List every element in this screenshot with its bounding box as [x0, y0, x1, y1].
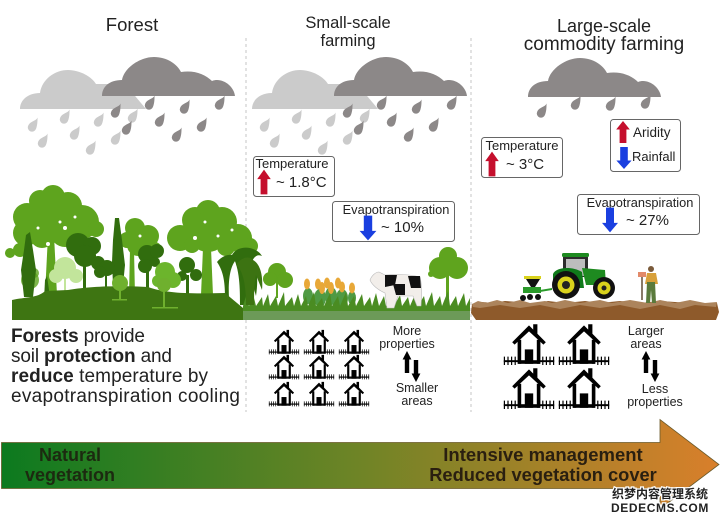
- cow: [370, 272, 422, 308]
- gradient arrow: Intensive management: [443, 444, 643, 465]
- label: more properties / smaller areas: More: [393, 324, 421, 338]
- callout: aridity and rainfall: Aridity: [633, 125, 671, 140]
- label: more properties / smaller areas: [379, 324, 438, 408]
- callout: temperature large-scale: [482, 138, 562, 178]
- callout: evapotranspiration large-scale: [578, 194, 700, 234]
- gradient arrow: vegetation: [25, 465, 115, 485]
- label: larger areas / less properties: Larger: [628, 324, 664, 338]
- heading: Large-scale commodity farming: commodity farming: [524, 34, 684, 55]
- illustration: forest: [5, 185, 262, 320]
- soil: [471, 301, 719, 320]
- callout: evapotranspiration small-scale: Evapotranspiration: [343, 202, 449, 217]
- heading: Forest: Forest: [106, 14, 158, 35]
- callout: evapotranspiration large-scale: Evapotranspiration: [587, 195, 693, 210]
- label: more properties / smaller areas: properties: [379, 337, 435, 351]
- tractor: [552, 253, 615, 299]
- forest clouds and rain: [20, 57, 235, 156]
- watermark: 织梦内容管理系统: [612, 486, 708, 501]
- icon grid: large properties: [504, 324, 609, 409]
- grass: [243, 291, 470, 320]
- callout: temperature small-scale: Temperature: [256, 156, 328, 171]
- callout: temperature small-scale: [254, 156, 334, 196]
- text block: forests provide: evapotranspiration cooling: [11, 386, 240, 407]
- gradient arrow: Reduced vegetation cover: [429, 464, 657, 485]
- label: more properties / smaller areas: areas: [401, 394, 433, 408]
- label: larger areas / less properties: properties: [627, 395, 683, 409]
- callout: evapotranspiration large-scale: ~ 27%: [626, 212, 669, 229]
- corn: [303, 278, 356, 307]
- text block: forests provide: soil protection and: [11, 346, 172, 367]
- label: larger areas / less properties: [627, 324, 683, 409]
- callout: temperature large-scale: ~ 3°C: [506, 156, 544, 173]
- label: more properties / smaller areas: Smaller: [396, 381, 438, 395]
- illustration: large-scale farm: [471, 253, 719, 320]
- callout: temperature small-scale: ~ 1.8°C: [276, 174, 327, 191]
- large-scale cloud and rain: [528, 58, 661, 119]
- text block: forests provide: [11, 326, 240, 407]
- watermark: [611, 486, 709, 515]
- callout: aridity and rainfall: Rainfall: [632, 149, 675, 164]
- icon grid: small properties: [269, 330, 369, 406]
- small-scale clouds and rain: [252, 57, 467, 156]
- callout: evapotranspiration small-scale: ~ 10%: [381, 219, 424, 236]
- palm: [236, 257, 262, 305]
- callout: temperature large-scale: Temperature: [486, 138, 558, 153]
- label: larger areas / less properties: areas: [630, 337, 662, 351]
- watermark: DEDECMS.COM: [611, 501, 709, 515]
- callout: evapotranspiration small-scale: [332, 202, 454, 242]
- seeder: [520, 276, 552, 301]
- callout: aridity and rainfall: [610, 120, 680, 172]
- farmer: [638, 266, 658, 303]
- text block: forests provide: reduce temperature by: [11, 366, 208, 387]
- heading: Small-scale farming: Small-scale: [305, 14, 391, 32]
- illustration: small-scale farm: [236, 247, 470, 320]
- text block: forests provide: Forests provide: [11, 326, 145, 347]
- gradient arrow: Natural: [39, 445, 101, 465]
- label: larger areas / less properties: Less: [642, 382, 668, 396]
- heading: Large-scale commodity farming: Large-scale: [557, 16, 651, 36]
- heading: Small-scale farming: farming: [320, 32, 376, 50]
- gradient arrow: [2, 420, 719, 509]
